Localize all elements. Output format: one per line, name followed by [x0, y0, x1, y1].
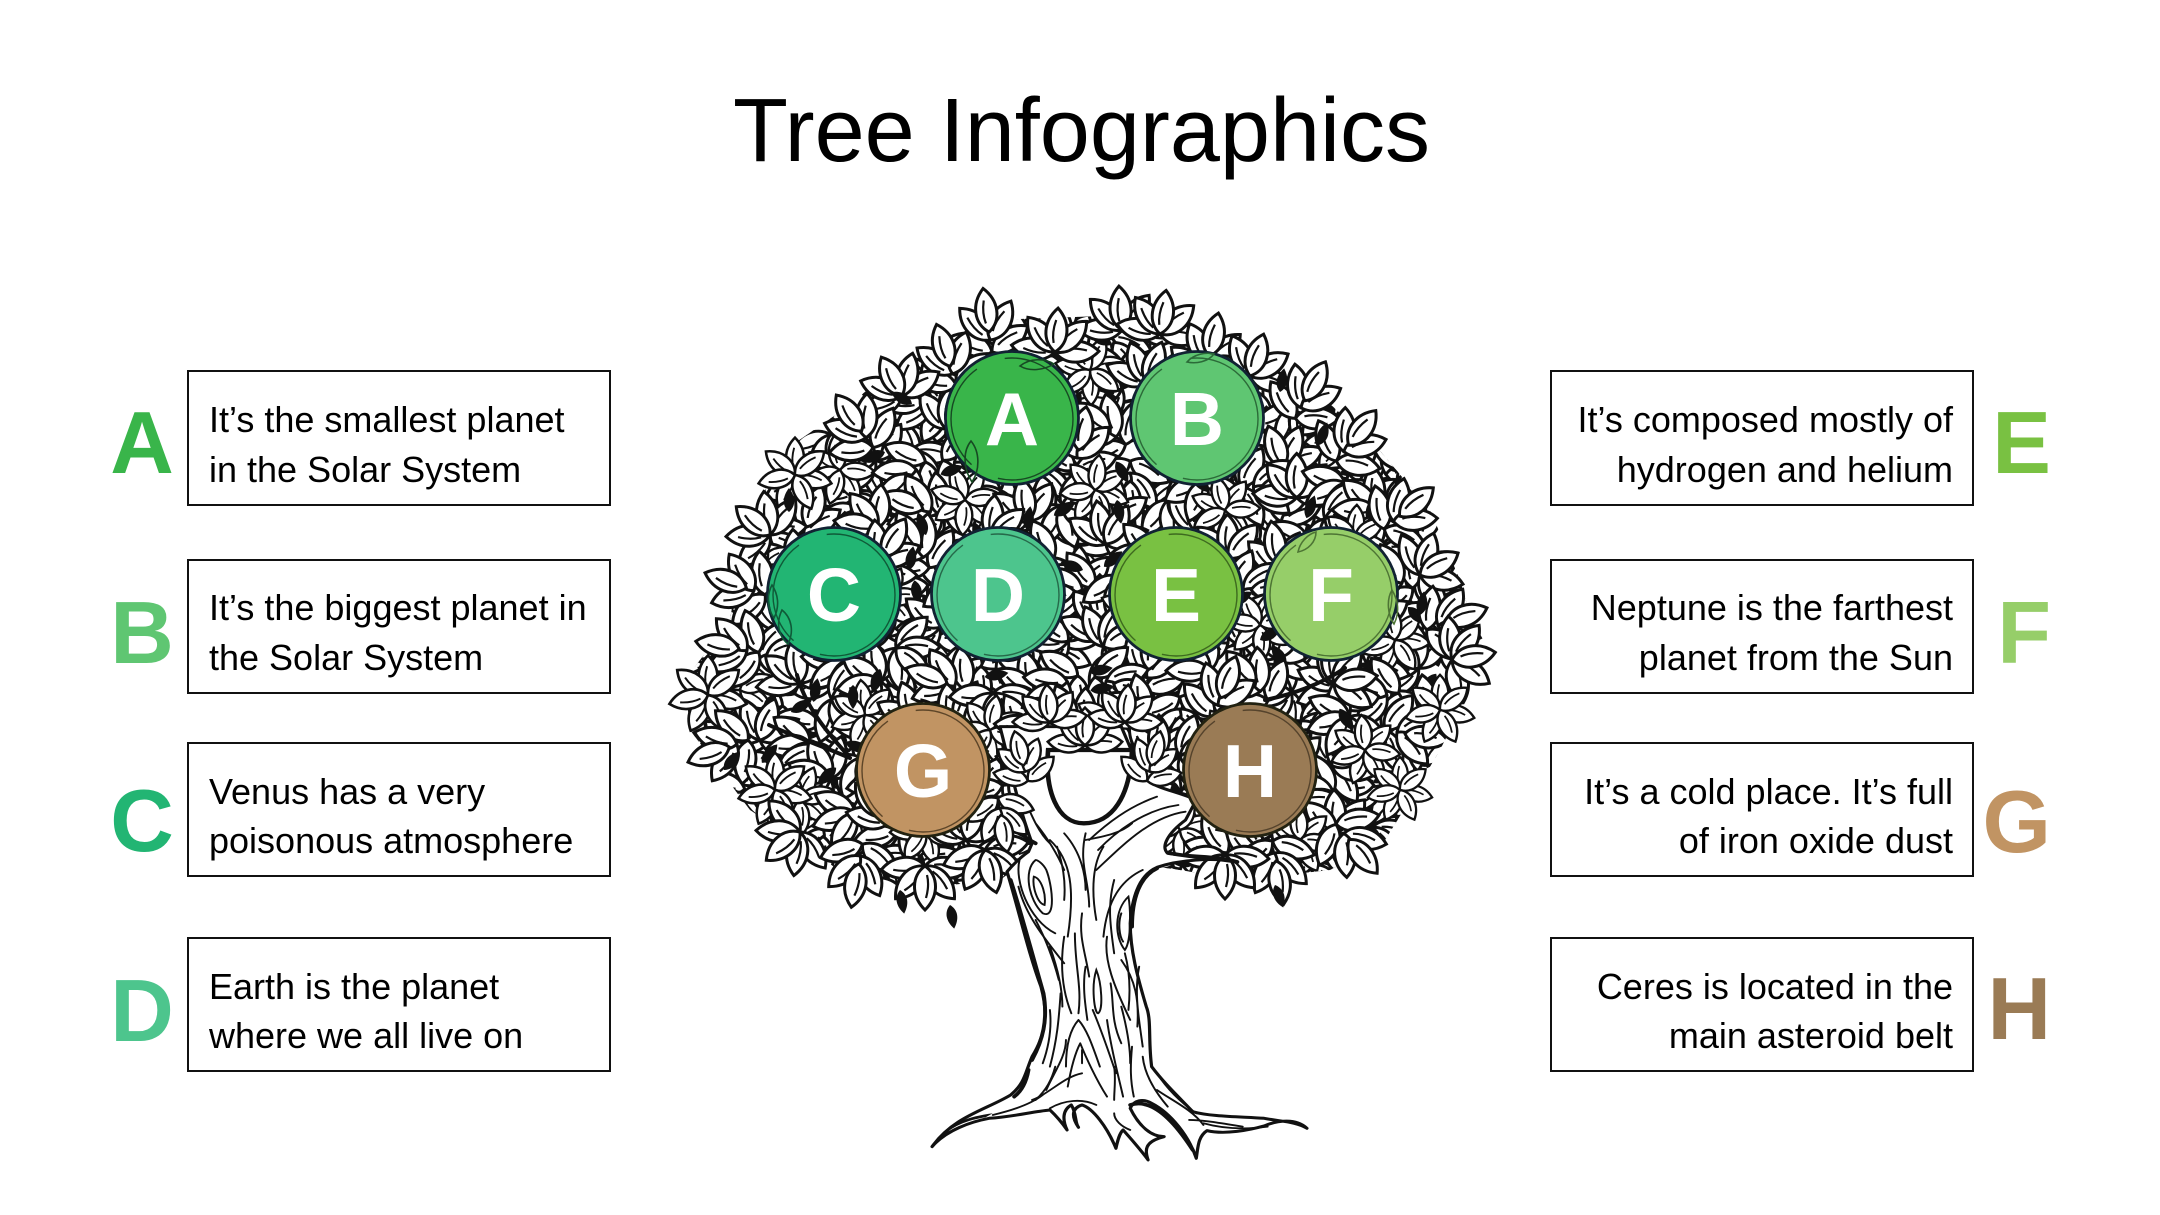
letter G: G	[1983, 772, 2051, 871]
marker G: G	[894, 729, 952, 813]
text box B: the Solar System	[209, 636, 483, 678]
text box H	[1550, 937, 1974, 1072]
letter B: B	[110, 583, 174, 682]
text box G: of iron oxide dust	[1679, 820, 1953, 861]
text box G	[1550, 742, 1974, 877]
text box C: poisonous atmosphere	[209, 820, 573, 861]
text box G: It’s a cold place. It’s full	[1584, 771, 1953, 812]
text box A: It’s the smallest planet	[209, 399, 565, 440]
text box E: It’s composed mostly of	[1578, 399, 1953, 440]
dense inner foliage	[688, 316, 1478, 885]
marker E	[1110, 528, 1242, 660]
marker B	[1130, 352, 1264, 484]
text box C: Venus has a very	[209, 771, 485, 812]
text box D: Earth is the planet	[209, 966, 499, 1007]
marker G	[856, 704, 990, 836]
text box H: main asteroid belt	[1669, 1015, 1953, 1056]
text box F	[1550, 559, 1974, 694]
marker D	[932, 528, 1064, 660]
letter A: A	[110, 393, 174, 492]
marker E: E	[1151, 553, 1201, 637]
letter E: E	[1992, 393, 2051, 492]
text box A	[187, 370, 611, 506]
text box H: Ceres is located in the	[1597, 966, 1953, 1007]
marker H	[1184, 704, 1316, 836]
marker F	[1264, 528, 1398, 660]
text box E	[1550, 370, 1974, 506]
tree canopy outer foliage	[667, 282, 1503, 930]
marker F: F	[1308, 553, 1354, 637]
text box D: where we all live on	[209, 1015, 523, 1056]
text box E: hydrogen and helium	[1617, 448, 1953, 490]
letter H: H	[1987, 959, 2051, 1058]
marker A: A	[985, 377, 1039, 461]
letter F: F	[1997, 583, 2051, 682]
letter C: C	[110, 771, 174, 870]
marker C: C	[807, 553, 861, 637]
title: Tree Infographics	[733, 81, 1430, 181]
text box F: planet from the Sun	[1639, 636, 1953, 678]
text box C	[187, 742, 611, 877]
marker D: D	[971, 553, 1025, 637]
text box B	[187, 559, 611, 694]
text box D	[187, 937, 611, 1072]
text box B: It’s the biggest planet in	[209, 587, 587, 628]
tree trunk and roots	[932, 727, 1307, 1160]
text box A: in the Solar System	[209, 448, 521, 490]
tree illustration	[668, 284, 1498, 1162]
text box F: Neptune is the farthest	[1591, 587, 1953, 628]
marker C	[768, 528, 900, 660]
marker B: B	[1170, 377, 1224, 461]
letter D: D	[110, 961, 174, 1060]
marker H: H	[1223, 729, 1277, 813]
foliage above trunk fork	[960, 681, 1194, 858]
marker A	[946, 352, 1078, 484]
